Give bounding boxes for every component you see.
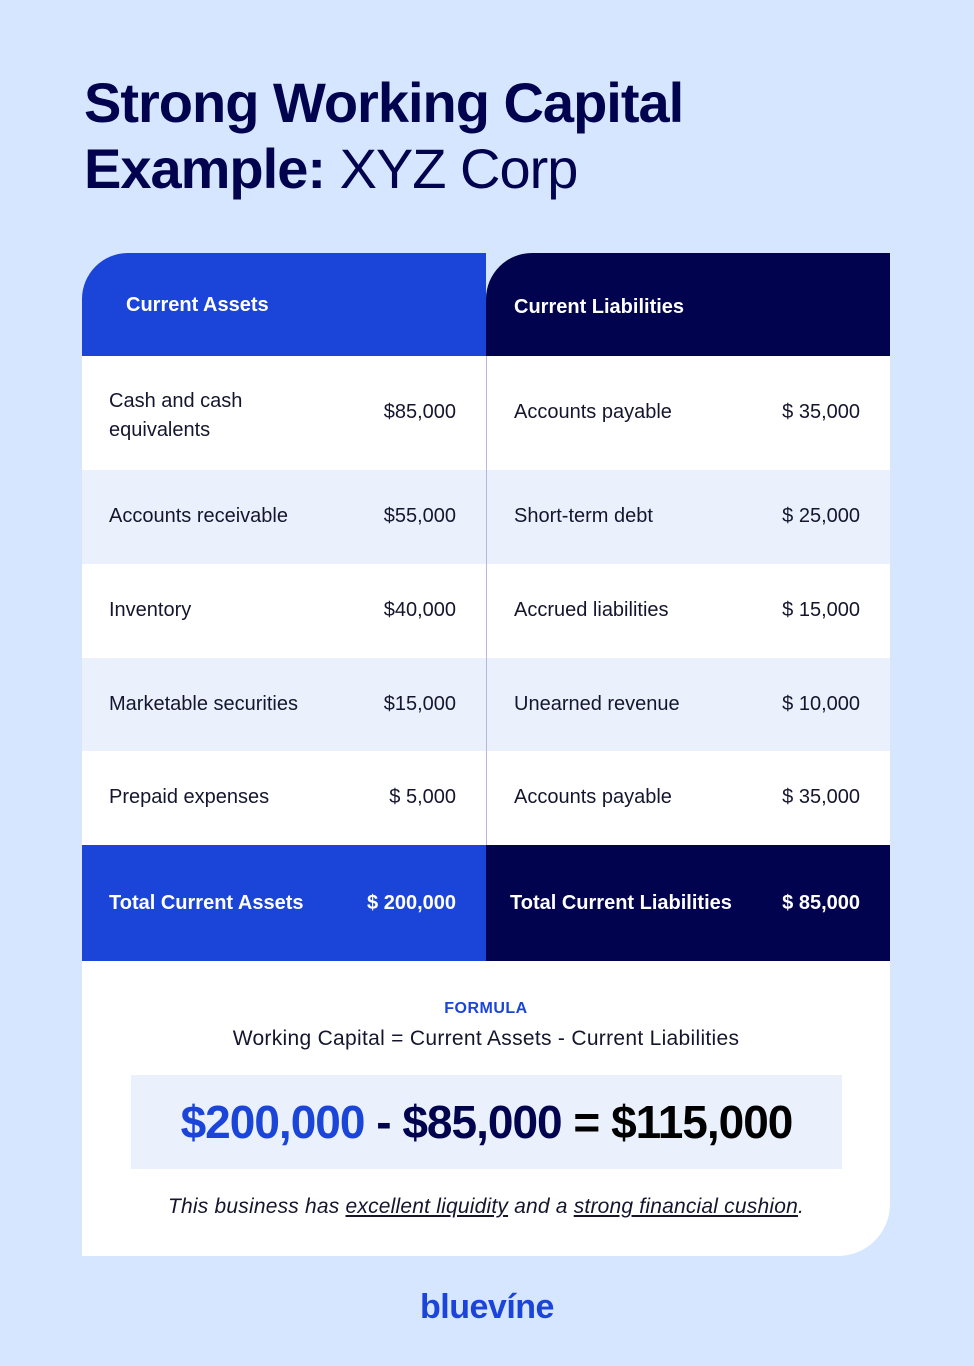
totals: $ 85,000 <box>782 892 860 914</box>
formula text: Working Capital = Current Assets - Current Liabilities <box>233 1027 739 1050</box>
row 1 <box>109 390 860 441</box>
logo: bluevíne <box>420 1288 554 1326</box>
row 1: equivalents <box>109 419 210 441</box>
row 2: $ 25,000 <box>782 505 860 527</box>
row 4: Unearned revenue <box>514 693 680 715</box>
row 5: Prepaid expenses <box>109 786 269 808</box>
formula label: FORMULA <box>444 1000 528 1017</box>
row 5: $ 5,000 <box>389 786 456 808</box>
row 1: $85,000 <box>384 401 456 423</box>
title: Strong Working Capital <box>84 71 683 134</box>
panel: table <box>82 253 890 845</box>
row 5 <box>109 786 860 808</box>
header: current assets: Current Assets <box>126 294 269 316</box>
header: current assets <box>82 253 486 356</box>
calculation box <box>131 1075 842 1169</box>
totals <box>82 845 890 961</box>
row 2 <box>109 505 860 527</box>
row 5: Accounts payable <box>514 786 672 808</box>
title <box>84 71 683 200</box>
row 3 <box>109 599 860 621</box>
row 3: $40,000 <box>384 599 456 621</box>
row 2: Short-term debt <box>514 505 653 527</box>
header: current liabilities <box>486 253 890 356</box>
title: Example: XYZ Corp <box>84 137 577 200</box>
row 2: Accounts receivable <box>109 505 288 527</box>
conclusion: This business has excellent liquidity and a strong financial cushion. <box>168 1195 804 1218</box>
header: current liabilities: Current Liabilities <box>514 296 684 318</box>
row 3: $ 15,000 <box>782 599 860 621</box>
row 4 <box>109 693 860 715</box>
row 2: $55,000 <box>384 505 456 527</box>
row 4: $15,000 <box>384 693 456 715</box>
row 3: Accrued liabilities <box>514 599 669 621</box>
calculation box: $200,000 - $85,000 = $115,000 <box>181 1096 792 1148</box>
row 1: $ 35,000 <box>782 401 860 423</box>
rows <box>82 356 890 845</box>
row 3: Inventory <box>109 599 191 621</box>
row 5: $ 35,000 <box>782 786 860 808</box>
totals: $ 200,000 <box>367 892 456 914</box>
panel: formula <box>82 961 890 1256</box>
row 4: Marketable securities <box>109 693 298 715</box>
totals: Total Current Liabilities <box>510 892 732 914</box>
row 4: $ 10,000 <box>782 693 860 715</box>
totals: Total Current Assets <box>109 892 303 914</box>
row 1: Cash and cash <box>109 390 242 412</box>
row 1: Accounts payable <box>514 401 672 423</box>
